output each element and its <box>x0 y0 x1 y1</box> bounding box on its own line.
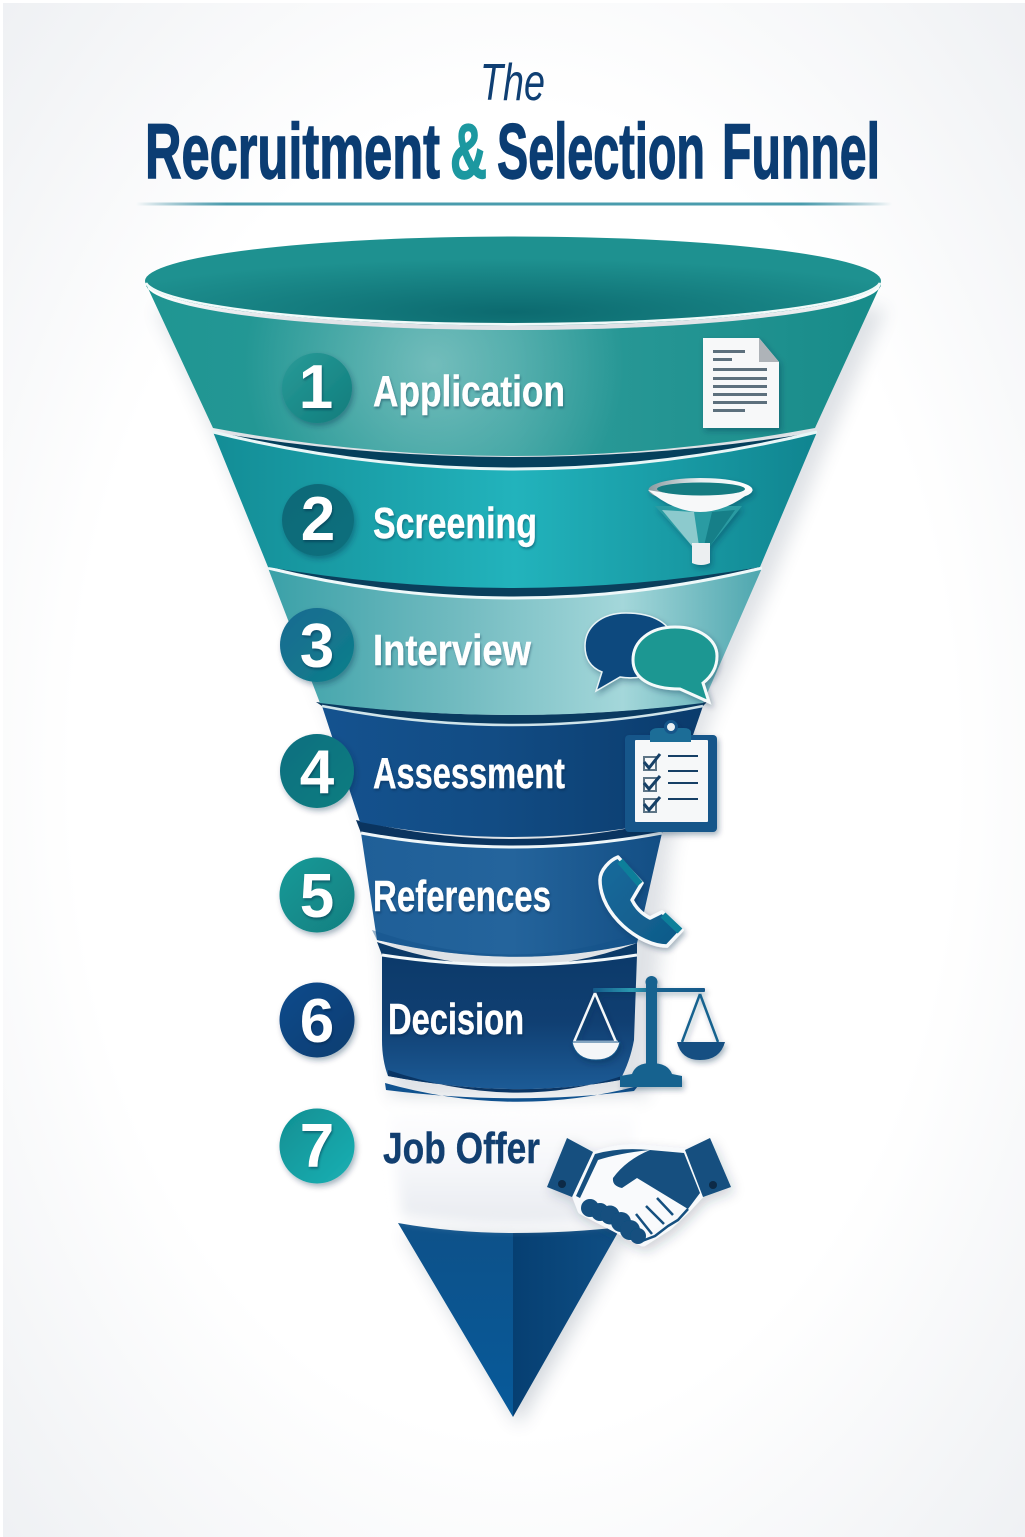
step badge 7 <box>280 1108 354 1184</box>
step badge 6 <box>280 982 354 1058</box>
step badge 4 <box>280 734 354 808</box>
title: main line: Recruitment <box>145 107 440 195</box>
title: main line: & <box>450 107 487 195</box>
step badge 2: 2 <box>301 485 335 554</box>
title: main line <box>145 107 880 195</box>
icon: clipboard <box>625 722 717 832</box>
title <box>145 54 880 195</box>
label: references: References <box>373 872 551 921</box>
icon: document <box>703 338 779 428</box>
step badge 1 <box>282 353 352 423</box>
step badge 3 <box>280 608 354 682</box>
label: screening: Screening <box>373 499 537 548</box>
icon: telephone <box>600 857 682 946</box>
band 6: decision <box>377 942 638 1102</box>
band 3: interview <box>268 567 762 715</box>
band 7: job offer <box>383 1104 640 1225</box>
step badge 1: 1 <box>299 353 333 422</box>
step badge 6: 6 <box>300 987 334 1056</box>
band 2: screening <box>213 432 817 588</box>
step badge 5: 5 <box>300 862 334 931</box>
step badge 5 <box>280 858 354 932</box>
label: interview: Interview <box>373 626 532 675</box>
label: job offer: Job Offer <box>383 1124 540 1173</box>
label: decision: Decision <box>388 995 524 1044</box>
step badge 7: 7 <box>300 1112 334 1181</box>
band 5: references <box>356 820 667 957</box>
icon: handshake <box>547 1138 731 1244</box>
title: The: The <box>480 54 545 112</box>
label: assessment: Assessment <box>373 749 565 798</box>
step badge 2 <box>282 484 354 556</box>
funnel tip <box>398 1223 626 1425</box>
step badge 4: 4 <box>300 738 335 807</box>
step badge 3: 3 <box>300 612 334 681</box>
band 1: application <box>145 236 881 456</box>
label: application: Application <box>373 367 565 416</box>
funnel shadow <box>156 308 886 1098</box>
band 4: assessment <box>316 702 707 837</box>
icon: scales <box>572 976 725 1087</box>
funnel opening <box>145 236 881 326</box>
icon: speech bubbles <box>585 613 717 702</box>
icon: small funnel <box>648 478 753 565</box>
title: main line: Selection <box>497 107 705 195</box>
title: main line: Funnel <box>722 107 880 195</box>
